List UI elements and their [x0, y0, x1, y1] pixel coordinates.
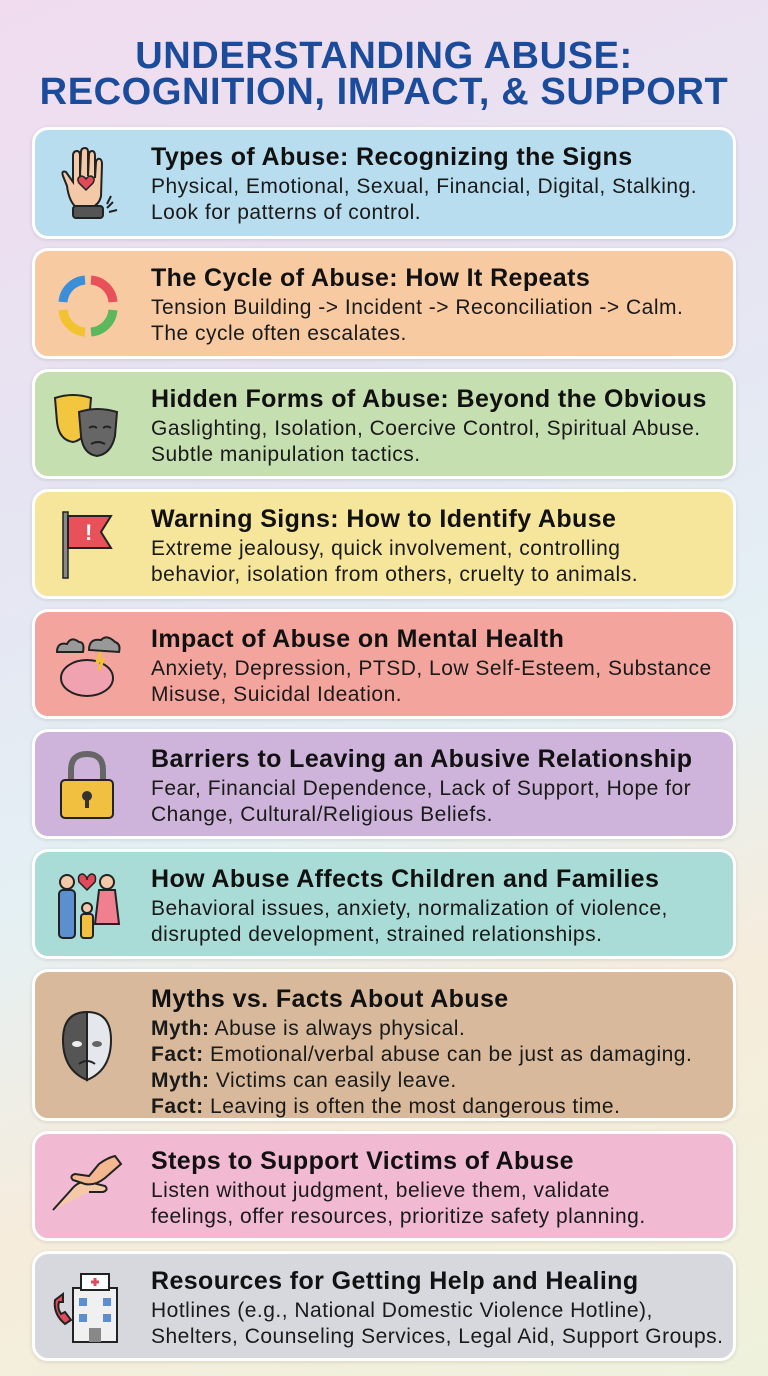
text: Myth: Abuse is always physical.	[151, 1017, 465, 1040]
panel: barriers	[32, 729, 736, 839]
text	[151, 657, 712, 706]
text: Behavioral issues, anxiety, normalization of violence,	[151, 897, 668, 920]
title: UNDERSTANDING ABUSE:	[135, 35, 633, 77]
text	[151, 537, 638, 586]
text: Listen without judgment, believe them, validate	[151, 1179, 610, 1202]
icon: hospital and phone	[54, 1273, 118, 1343]
panel: support steps	[32, 1131, 736, 1241]
heading: Barriers to Leaving an Abusive Relationship	[151, 745, 692, 773]
text	[151, 417, 701, 466]
text: Extreme jealousy, quick involvement, controlling	[151, 537, 620, 560]
text: Shelters, Counseling Services, Legal Aid, Support Groups.	[151, 1325, 723, 1348]
icon: flag: !	[85, 520, 92, 545]
text: Anxiety, Depression, PTSD, Low Self-Esteem, Substance	[151, 657, 712, 680]
panel: cycle of abuse	[32, 248, 736, 359]
title: RECOGNITION, IMPACT, & SUPPORT	[40, 71, 728, 113]
text	[151, 777, 691, 826]
text	[151, 1017, 692, 1118]
text: Myth: Victims can easily leave.	[151, 1069, 457, 1092]
icon: half face	[62, 1011, 112, 1082]
heading: Types of Abuse: Recognizing the Signs	[151, 143, 632, 171]
heading: Warning Signs: How to Identify Abuse	[151, 505, 616, 533]
icon: padlock	[60, 751, 114, 819]
text: Fear, Financial Dependence, Lack of Support, Hope for	[151, 777, 691, 800]
text: Tension Building -> Incident -> Reconciliation -> Calm.	[151, 296, 683, 319]
text: behavior, isolation from others, cruelty to animals.	[151, 563, 638, 586]
text	[151, 1179, 646, 1228]
text	[151, 1299, 723, 1348]
heading: Impact of Abuse on Mental Health	[151, 625, 564, 653]
panel: warning signs	[32, 489, 736, 599]
panel: myths vs facts	[32, 969, 736, 1121]
panel: children and families	[32, 849, 736, 959]
icon: masks	[54, 394, 118, 457]
heading: Myths vs. Facts About Abuse	[151, 985, 509, 1013]
heading: How Abuse Affects Children and Families	[151, 865, 659, 893]
text: feelings, offer resources, prioritize safety planning.	[151, 1205, 646, 1228]
panel: hidden forms	[32, 369, 736, 479]
text	[151, 897, 668, 946]
text: Misuse, Suicidal Ideation.	[151, 683, 402, 706]
text: Fact: Leaving is often the most dangerous time.	[151, 1095, 620, 1118]
heading: Hidden Forms of Abuse: Beyond the Obvious	[151, 385, 707, 413]
text	[151, 175, 697, 224]
icon: cycle arrows	[58, 276, 118, 336]
icon: family	[58, 873, 120, 939]
text: disrupted development, strained relationships.	[151, 923, 602, 946]
panel: mental health	[32, 609, 736, 719]
icon: brain with clouds	[56, 636, 120, 697]
text: Hotlines (e.g., National Domestic Violence Hotline),	[151, 1299, 653, 1322]
text: Physical, Emotional, Sexual, Financial, Digital, Stalking.	[151, 175, 697, 198]
text: Gaslighting, Isolation, Coercive Control, Spiritual Abuse.	[151, 417, 701, 440]
icon: flag	[62, 511, 113, 579]
panel: types of abuse	[32, 127, 736, 239]
icon: hand with heart	[61, 147, 118, 219]
panel: resources	[32, 1251, 736, 1361]
text: Change, Cultural/Religious Beliefs.	[151, 803, 493, 826]
text: Look for patterns of control.	[151, 201, 421, 224]
heading: The Cycle of Abuse: How It Repeats	[151, 264, 590, 292]
text: Fact: Emotional/verbal abuse can be just as damaging.	[151, 1043, 692, 1066]
icon: helping hands	[52, 1154, 122, 1211]
heading: Resources for Getting Help and Healing	[151, 1267, 639, 1295]
text: Subtle manipulation tactics.	[151, 443, 421, 466]
heading: Steps to Support Victims of Abuse	[151, 1147, 574, 1175]
text: The cycle often escalates.	[151, 322, 407, 345]
title	[40, 35, 728, 113]
text	[151, 296, 683, 345]
